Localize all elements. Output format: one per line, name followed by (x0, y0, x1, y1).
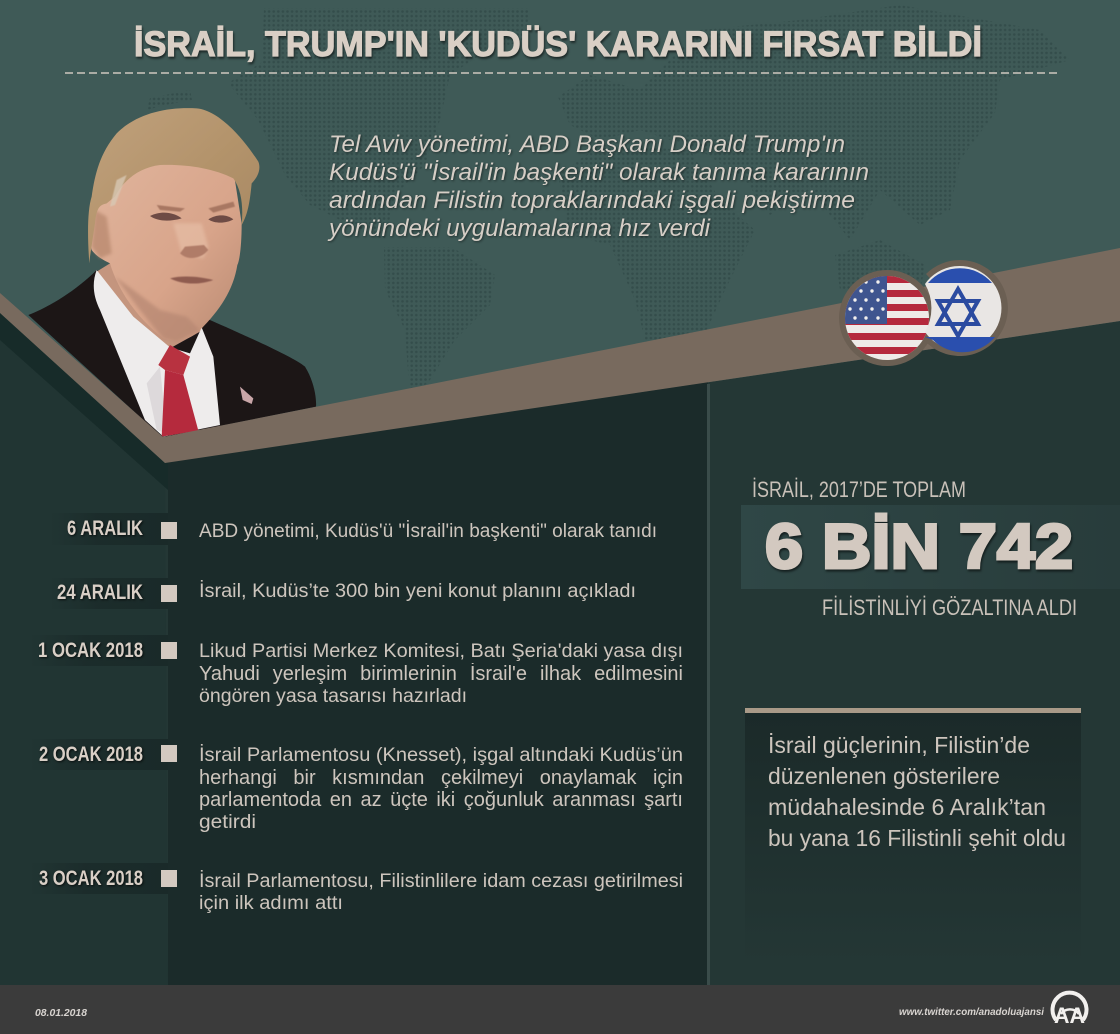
event: 3 Ocak 2018 (30, 863, 683, 914)
callout: martyrs: düzenlenen gösterilere (768, 763, 1000, 789)
callout: martyrs: İsrail güçlerinin, Filistin’de (768, 732, 1030, 758)
lower dark panels (0, 313, 1120, 985)
flag: USA (839, 270, 935, 366)
tan chevron band (0, 248, 1120, 463)
event: 3 Ocak 2018: 3 OCAK 2018 (39, 867, 143, 890)
event: 2 Ocak 2018: 2 OCAK 2018 (39, 743, 143, 766)
intro text (327, 131, 869, 242)
callout: martyrs: müdahalesinde 6 Aralık’tan (768, 794, 1046, 820)
flag: Israel (925, 260, 1008, 356)
footer (0, 985, 1120, 1034)
event: 6 Aralık: ABD yönetimi, Kudüs'ü "İsrail'in başkenti" olarak tanıdı (199, 521, 657, 542)
event: 1 Ocak 2018: öngören yasa tasarısı hazırladı (199, 686, 467, 707)
stat: detentions: İSRAİL, 2017’DE TOPLAM (752, 477, 966, 502)
title: İSRAİL, TRUMP'IN 'KUDÜS' KARARINI FIRSAT BİLDİ (134, 25, 982, 64)
event: 3 Ocak 2018: İsrail Parlamentosu, Filistinlilere idam cezası getirilmesi (199, 871, 683, 892)
event: 2 Ocak 2018: parlamentoda en az üçte iki çoğunluk aranması şartı (199, 789, 683, 811)
event: 2 Ocak 2018: İsrail Parlamentosu (Knesset), işgal altındaki Kudüs’ün (199, 745, 683, 766)
portrait: Donald Trump (28, 108, 316, 437)
stat: detentions (741, 477, 1120, 620)
icon: Anadolu Agency logo: AA (1054, 1003, 1085, 1028)
event: 2 Ocak 2018: herhangi bir kısmından çekilmeyi onaylamak için (199, 767, 683, 789)
event: 6 Aralık: 6 ARALIK (67, 517, 143, 540)
timeline (30, 513, 683, 914)
event: 1 Ocak 2018: Yahudi yerleşim birimlerinin İsrail'e ilhak edilmesini (199, 663, 683, 685)
intro text: yönündeki uygulamalarına hız verdi (327, 215, 711, 242)
event: 6 Aralık (50, 513, 657, 545)
event: 1 Ocak 2018: Likud Partisi Merkez Komitesi, Batı Şeria'daki yasa dışı (199, 641, 683, 662)
event: 24 Aralık: İsrail, Kudüs’te 300 bin yeni konut planını açıkladı (199, 581, 636, 602)
stat: detentions: 6 BİN 742 (765, 512, 1073, 582)
event: 2 Ocak 2018 (30, 739, 683, 833)
intro text: Tel Aviv yönetimi, ABD Başkanı Donald Trump'ın (329, 131, 845, 158)
event: 1 Ocak 2018 (30, 635, 683, 707)
event: 24 Aralık: 24 ARALIK (57, 581, 143, 604)
callout: martyrs: bu yana 16 Filistinli şehit oldu (768, 825, 1066, 851)
event: 24 Aralık (50, 578, 636, 609)
world map dots (147, 5, 1070, 400)
intro text: ardından Filistin topraklarındaki işgali pekiştirme (329, 187, 855, 214)
callout: martyrs (745, 708, 1081, 963)
event: 1 Ocak 2018: 1 OCAK 2018 (38, 639, 143, 662)
footer: 08.01.2018 (35, 1008, 87, 1019)
event: 2 Ocak 2018: getirdi (199, 812, 256, 833)
icon: Anadolu Agency logo (1052, 993, 1086, 1028)
intro text: Kudüs'ü "İsrail'in başkenti" olarak tanıma kararının (329, 159, 869, 186)
footer: www.twitter.com/anadoluajansi (899, 1006, 1045, 1018)
event: 3 Ocak 2018: için ilk adımı attı (199, 893, 343, 914)
